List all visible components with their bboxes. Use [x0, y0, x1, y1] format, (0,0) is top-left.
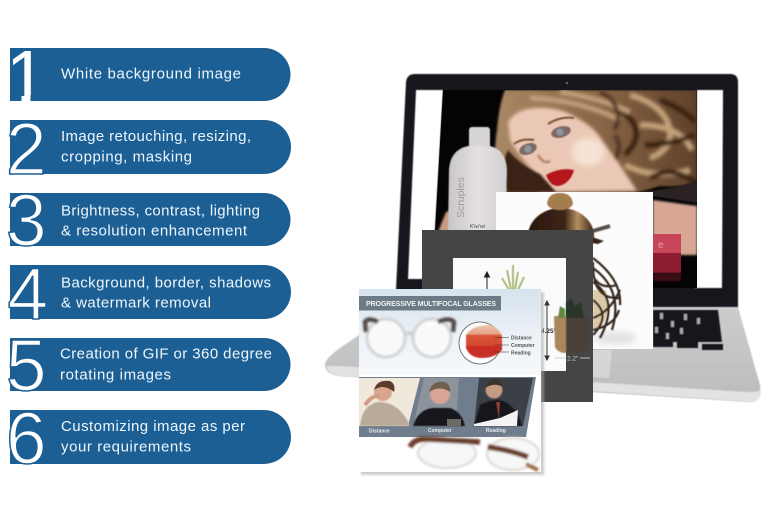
item 4 — [8, 254, 291, 335]
arrow: height — [484, 272, 490, 290]
arrow: height lower — [545, 301, 549, 360]
icon: glasses side view — [410, 438, 539, 470]
lens labels: Reading — [511, 350, 531, 356]
keyboard — [653, 310, 723, 350]
bottle: K'iw'wi — [470, 224, 485, 230]
screen image: beauty photo — [432, 90, 697, 288]
item 2: 2 — [6, 109, 47, 190]
item 4: & watermark removal — [61, 294, 211, 312]
item 1 — [10, 48, 290, 101]
icon: bird figurine — [528, 193, 610, 264]
photo strip — [359, 377, 536, 437]
lens labels — [495, 336, 535, 356]
bottle: Scruples — [455, 177, 467, 218]
item 5: Creation of GIF or 360 degree — [60, 346, 272, 362]
item 3: Brightness, contrast, lighting — [61, 202, 260, 220]
screen image: beauty photo: e — [658, 240, 664, 251]
item 2 — [6, 109, 291, 190]
icon: grass plant — [502, 265, 524, 290]
shoulder — [653, 200, 697, 255]
lens labels: Distance — [511, 336, 532, 342]
item 2: cropping, masking — [61, 148, 192, 166]
photo captions: Distance — [369, 428, 390, 434]
laptop base — [325, 307, 760, 402]
label: height: 4.25" — [541, 328, 557, 335]
item 4: 4 — [8, 254, 48, 335]
item 4: Background, border, shadows — [61, 274, 271, 292]
laptop — [325, 74, 760, 475]
item 1: White background image — [61, 66, 241, 82]
card shadow — [361, 292, 544, 475]
label: width: 2.2" — [567, 356, 579, 362]
card header — [359, 296, 501, 310]
photo captions — [369, 428, 506, 434]
item 2: Image retouching, resizing, — [61, 128, 251, 145]
item 6: 6 — [6, 398, 47, 480]
card header: PROGRESSIVE MULTIFOCAL GLASSES — [366, 301, 496, 308]
list of services — [6, 36, 291, 480]
face — [508, 108, 637, 192]
item 5: rotating images — [60, 366, 171, 384]
photo: distance — [359, 378, 420, 426]
lens labels: Computer — [511, 343, 535, 349]
hair — [495, 90, 697, 192]
dark dress — [640, 180, 697, 203]
item 6 — [6, 398, 291, 480]
item 3: 3 — [6, 180, 47, 262]
item 1: 1 — [6, 36, 47, 118]
decor product card — [496, 192, 653, 349]
front lip — [326, 366, 760, 402]
icon: glasses front view — [365, 319, 454, 357]
item 6: your requirements — [61, 438, 191, 456]
nose shadow — [538, 155, 550, 162]
photo: reading — [474, 378, 533, 426]
eyes — [518, 126, 572, 156]
dimension product card — [422, 230, 593, 402]
hair below face — [504, 150, 556, 192]
glasses product card — [359, 289, 544, 475]
photo captions: Reading — [486, 428, 506, 434]
photo captions: Computer — [428, 428, 452, 434]
item 5: 5 — [6, 326, 47, 406]
item 6: Customizing image as per — [61, 418, 245, 435]
bottle — [448, 127, 507, 232]
cheek highlight — [572, 138, 604, 166]
icon: cork planter — [554, 298, 589, 353]
red banner — [653, 234, 681, 253]
arrow: width — [555, 357, 590, 359]
photo: computer — [413, 378, 465, 426]
shadow — [593, 331, 637, 345]
item 5 — [6, 326, 290, 406]
item 3: & resolution enhancement — [61, 222, 248, 240]
camera — [566, 82, 568, 84]
laptop screen bezel — [396, 74, 738, 307]
item 3 — [6, 180, 290, 262]
lips — [546, 169, 574, 186]
screen: white side bars — [408, 90, 723, 288]
curls — [530, 92, 695, 182]
icon: lens zones — [459, 322, 502, 364]
trackpad — [593, 350, 612, 378]
brows — [514, 118, 574, 144]
icon: wire basket — [593, 258, 620, 338]
